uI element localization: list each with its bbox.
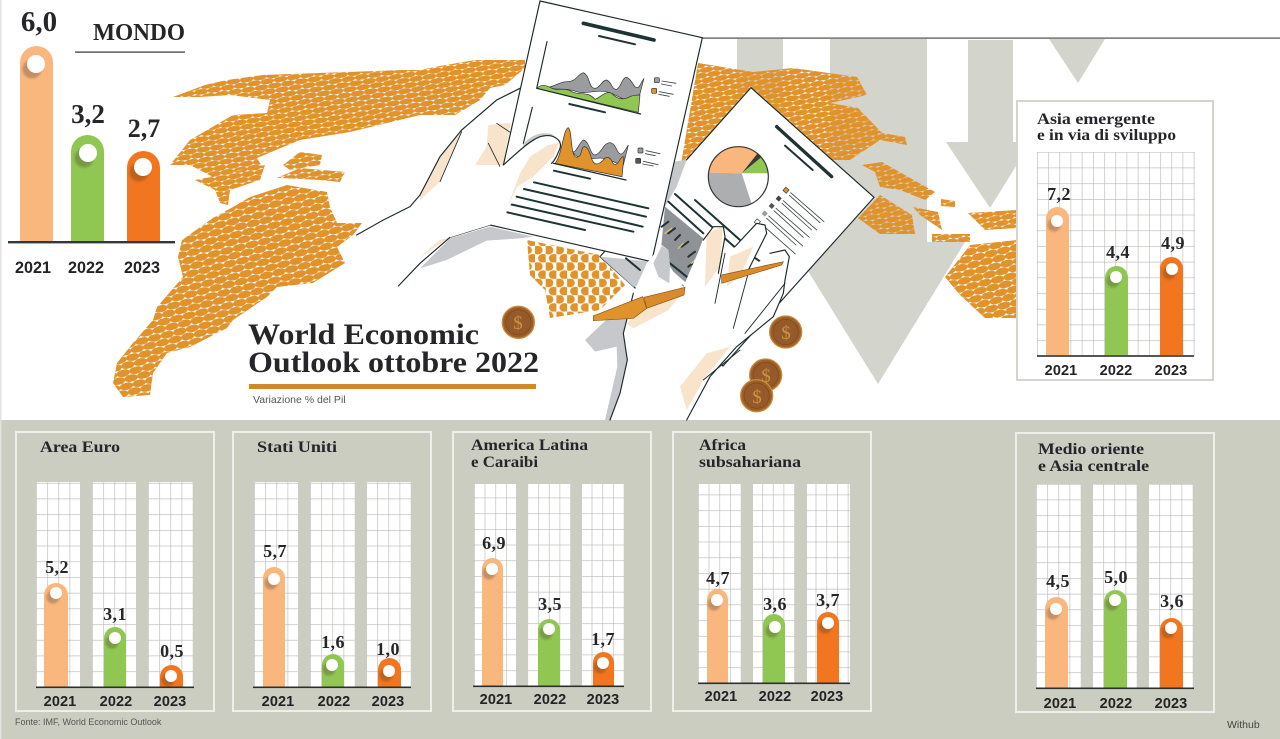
bar 2022: 3,6 [763, 594, 787, 614]
title [248, 318, 539, 379]
coin [502, 306, 534, 338]
panel: Mondo [8, 6, 185, 277]
bar 2022 [1105, 242, 1130, 355]
bar 2021: 4,7 [706, 568, 730, 588]
heading: Medio oriente [1038, 441, 1144, 458]
years: 2022 [1100, 696, 1132, 712]
bar 2021 [706, 568, 730, 683]
area chart two [523, 107, 660, 180]
pen [593, 262, 783, 321]
coin symbols [513, 313, 791, 408]
bar 2021 [1046, 184, 1071, 355]
years: 2022 [534, 692, 566, 708]
text stripes [507, 182, 648, 232]
bar 2023 [1160, 591, 1184, 688]
paper shadow [650, 160, 687, 262]
title underline [249, 384, 536, 389]
bar 2022: 3,2 [71, 99, 105, 129]
downward arrows [737, 39, 1105, 384]
bar 2021 [20, 6, 57, 241]
heading: MONDO [93, 20, 185, 46]
years [1044, 696, 1187, 712]
coin [770, 316, 802, 348]
bar 2022 [1104, 567, 1128, 688]
bar 2022 [71, 99, 105, 241]
coin symbols: $ [781, 323, 791, 344]
heading: Area Euro [40, 439, 120, 456]
bar 2021 [263, 541, 287, 687]
heading: Stati Uniti [257, 439, 338, 456]
bar 2022: 5,0 [1104, 567, 1128, 587]
dotted world map [113, 60, 1017, 397]
bar 2023 [816, 590, 840, 683]
years: 2021 [44, 694, 76, 710]
bar 2021 [482, 533, 506, 686]
left thumb over sheet [450, 133, 562, 237]
coin symbols: $ [513, 313, 523, 334]
years [262, 694, 404, 710]
report sheet with pie chart [600, 88, 874, 366]
coin symbols: $ [752, 387, 762, 408]
bar 2023: 4,9 [1161, 233, 1185, 253]
years: 2022 [1100, 363, 1132, 379]
heading: e Asia centrale [1038, 458, 1149, 475]
coin [741, 380, 773, 412]
bar 2022 [321, 632, 345, 687]
years: 2022 [318, 694, 350, 710]
years [705, 689, 843, 705]
years [480, 692, 619, 708]
panel: Africa subsahariana [673, 432, 871, 711]
left hand behind sheet [357, 88, 530, 286]
illustration: hands holding reports, pen and coins [357, 1, 874, 420]
bar 2021 [1045, 571, 1070, 688]
panel: Asia emergente [1017, 101, 1213, 380]
bar 2021: 6,0 [21, 6, 57, 38]
panel: Stati Uniti [233, 432, 431, 711]
coin [750, 359, 782, 391]
bar 2021: 7,2 [1047, 184, 1071, 204]
years: 2023 [124, 259, 160, 277]
years: 2021 [705, 689, 737, 705]
heading lines [777, 127, 832, 177]
title: Outlook ottobre 2022 [248, 346, 539, 379]
years: 2023 [811, 689, 843, 705]
candlestick block [660, 207, 703, 283]
area chart one [537, 42, 676, 114]
years: 2021 [480, 692, 512, 708]
bar 2023 [591, 629, 615, 686]
bar 2022 [763, 594, 787, 683]
years: 2023 [587, 692, 619, 708]
years: 2021 [15, 259, 51, 277]
heading: subsahariana [699, 454, 801, 471]
years [1045, 363, 1187, 379]
bar 2021 [44, 557, 69, 687]
shadow of right hand [585, 310, 628, 420]
years: 2022 [759, 689, 791, 705]
heading: Africa [699, 437, 746, 454]
source note: Fonte: IMF, World Economic Outlook [15, 717, 162, 727]
heading [471, 437, 588, 471]
bar 2022: 1,6 [321, 632, 345, 652]
years [44, 694, 186, 710]
years: 2023 [1155, 696, 1187, 712]
top rule [700, 38, 1280, 39]
bar 2021: 5,2 [45, 557, 69, 577]
years [15, 259, 160, 277]
bar 2023: 3,6 [1160, 591, 1184, 611]
years: 2021 [262, 694, 294, 710]
panel: Area Euro [16, 432, 214, 711]
heading: America Latina [471, 437, 588, 454]
bar 2022: 3,1 [103, 604, 127, 624]
years: 2023 [1155, 363, 1187, 379]
years: 2023 [372, 694, 404, 710]
bar 2023 [127, 114, 160, 241]
bar 2023: 0,5 [160, 641, 184, 661]
years: 2022 [68, 259, 104, 277]
heading [1037, 111, 1176, 144]
heading: e in via di sviluppo [1037, 127, 1176, 144]
panel: Medio oriente e Asia centrale [1016, 433, 1214, 712]
title: World Economic [248, 318, 479, 351]
text stripes [626, 194, 783, 293]
heading lines [583, 23, 654, 40]
heading [699, 437, 801, 471]
bar 2021: 5,7 [263, 541, 287, 561]
bar 2023: 1,0 [376, 639, 400, 659]
bar 2021: 6,9 [482, 533, 506, 553]
credit: Withub [1227, 719, 1260, 731]
years: 2021 [1044, 696, 1076, 712]
bar 2022 [103, 604, 127, 687]
coin symbols: $ [761, 366, 771, 387]
panel: America Latina e Caraibi [453, 432, 651, 711]
bar 2021: 4,5 [1046, 571, 1070, 591]
subtitle: Variazione % del Pil [253, 394, 346, 406]
bar 2023 [160, 641, 184, 687]
heading: e Caraibi [471, 454, 539, 471]
shadow of left hand [420, 227, 533, 268]
heading [1038, 441, 1149, 475]
years: 2021 [1045, 363, 1077, 379]
bar 2023: 3,7 [816, 590, 840, 610]
bar 2023: 1,7 [591, 629, 615, 649]
bottom grey band [0, 420, 1280, 739]
years: 2022 [100, 694, 132, 710]
bar 2022 [538, 594, 562, 686]
bar 2023 [1160, 233, 1185, 355]
bar 2023 [376, 639, 401, 687]
pie legend [754, 187, 824, 254]
bar 2022: 4,4 [1106, 242, 1130, 262]
pie chart [708, 147, 768, 207]
bar 2023: 2,7 [128, 114, 160, 143]
bar 2022: 3,5 [538, 594, 562, 614]
heading: Asia emergente [1037, 111, 1155, 128]
years: 2023 [154, 694, 186, 710]
report sheet with area charts [490, 1, 702, 262]
right hand with fingers on sheet [610, 223, 789, 420]
